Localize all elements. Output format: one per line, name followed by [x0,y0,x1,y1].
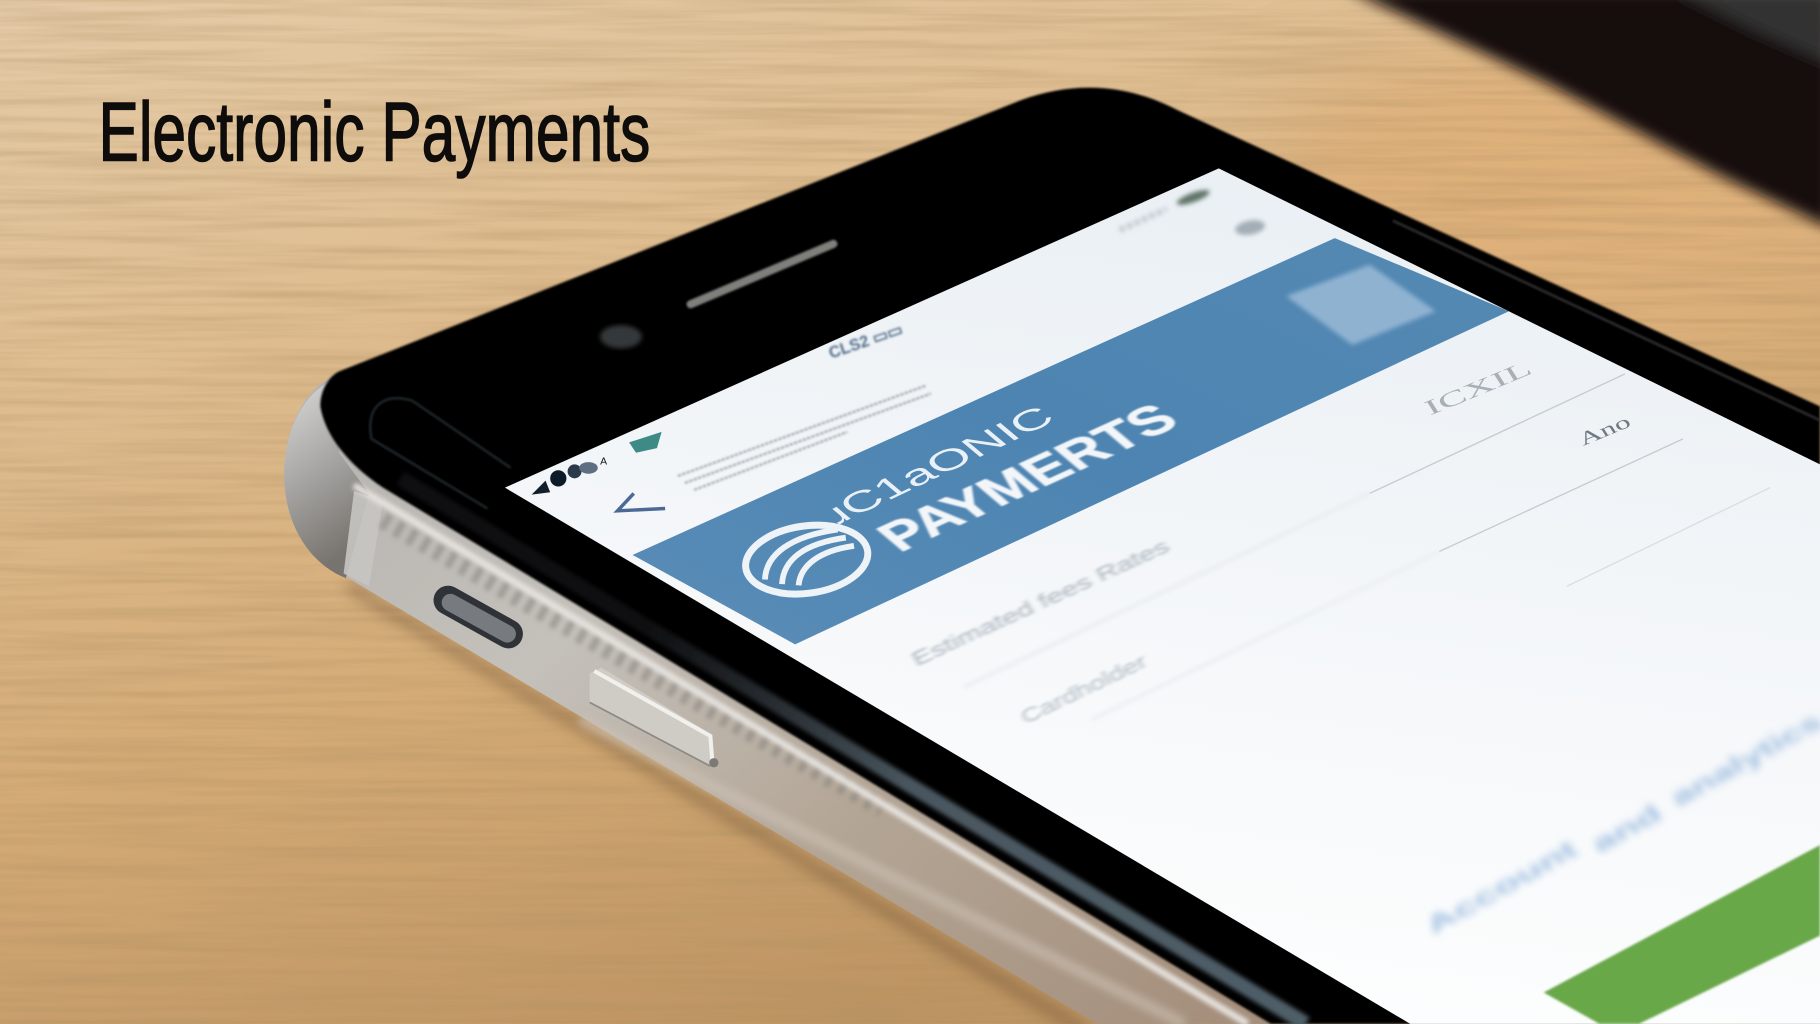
speaker grille [691,244,833,304]
row divider lines [963,374,1770,720]
row label: right second: Ano [1574,411,1635,450]
phone screen [505,168,1820,1024]
app logo [741,518,872,601]
title: Electronic Payments [99,86,650,179]
right bezel glint [1393,221,1820,420]
dark object in the top right corner [1346,0,1820,229]
banner text: bold line: PAYMERTS [865,395,1190,560]
status bar clock: CLS2 ▭▭ [827,321,905,363]
blurred row label: card: Cardholder [1016,651,1152,729]
side button [590,668,718,767]
blue header banner [633,238,1509,644]
blue-grey glass edge [400,478,1306,1024]
status bar icons: A [600,456,607,467]
front camera [600,325,642,348]
dotted antenna texture on the frame [383,520,882,809]
phone [284,88,1820,1024]
light square in banner [1286,265,1436,345]
status bar icons [532,432,662,495]
blurred blue link text: and [1585,800,1668,858]
back chevron [618,493,665,511]
blurred blue link text [1419,708,1820,939]
row label: right top: ICXIL [1419,356,1536,420]
lower frame sheen [580,720,1184,1024]
shadow where phone meets table [348,586,1085,1024]
green action button [1544,845,1820,1024]
battery and signal [1120,187,1266,237]
silver rounded corner [284,377,369,578]
blurred row label: fees: Estimated fees Rates [907,535,1174,671]
black front bezel [320,88,1820,1024]
inner bezel outline [370,398,511,509]
blurred blue link text: Account [1419,836,1583,939]
banner text: small line: ɹC1aONIC [814,400,1063,530]
charging port [448,600,508,634]
silver band detail [344,491,383,586]
silver phone body [284,374,1509,1024]
upper frame highlight [354,485,1248,1024]
small status text [678,385,931,490]
